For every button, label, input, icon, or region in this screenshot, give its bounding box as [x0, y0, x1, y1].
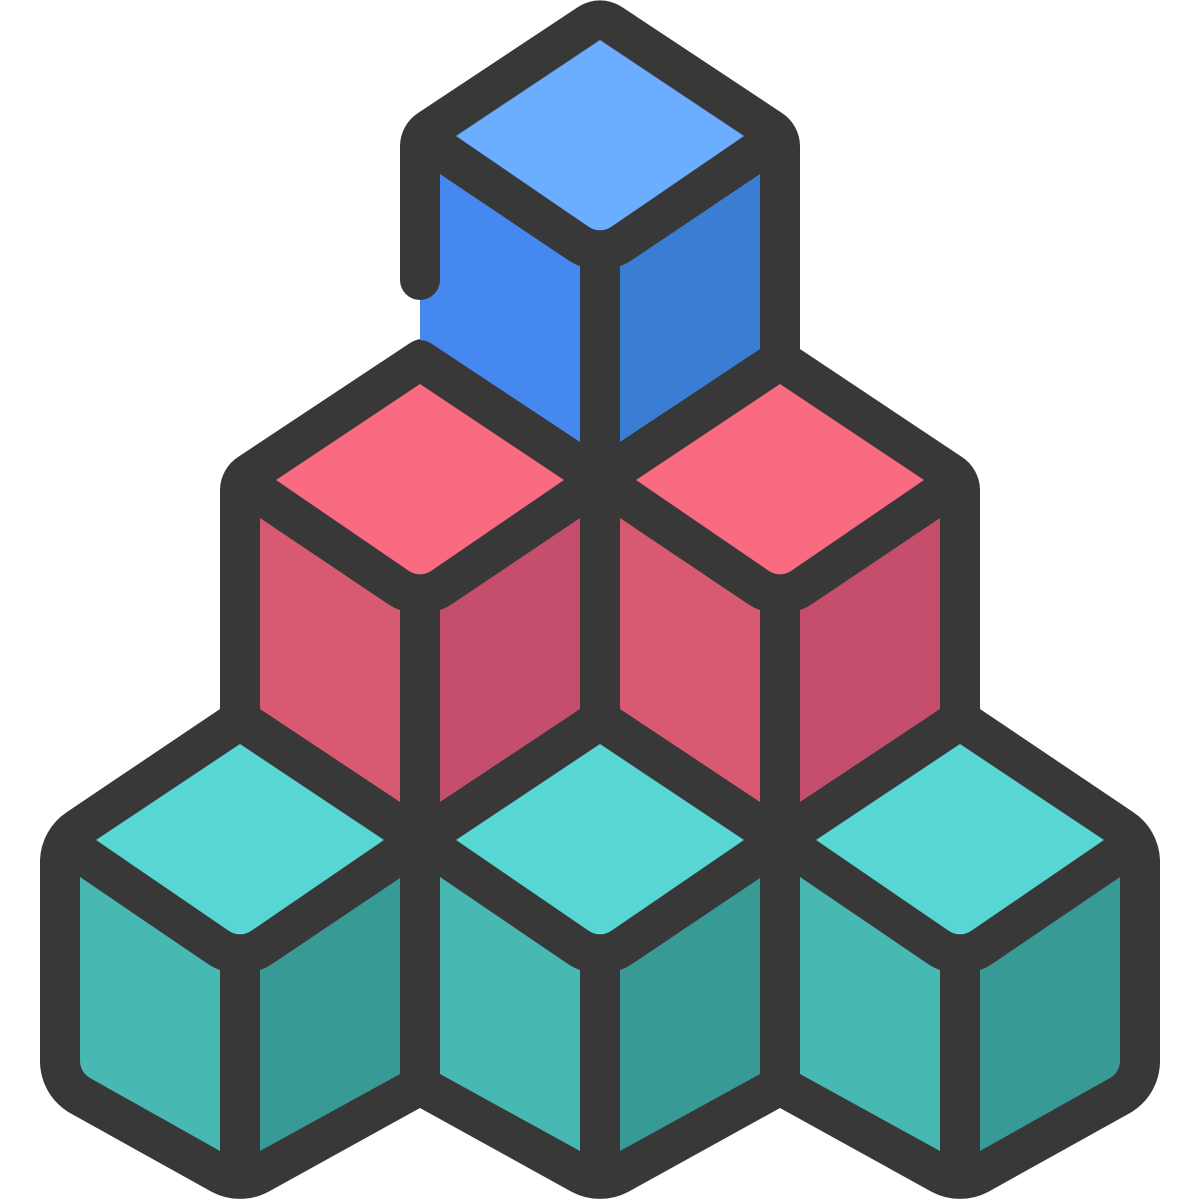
cube: bottom right teal [800, 744, 1120, 1151]
cube: top blue [420, 40, 760, 442]
cube: middle left pink [260, 384, 580, 802]
cube: bottom left teal [80, 744, 400, 1151]
cube: middle right pink [620, 384, 940, 802]
cube: bottom middle teal [440, 744, 760, 1151]
